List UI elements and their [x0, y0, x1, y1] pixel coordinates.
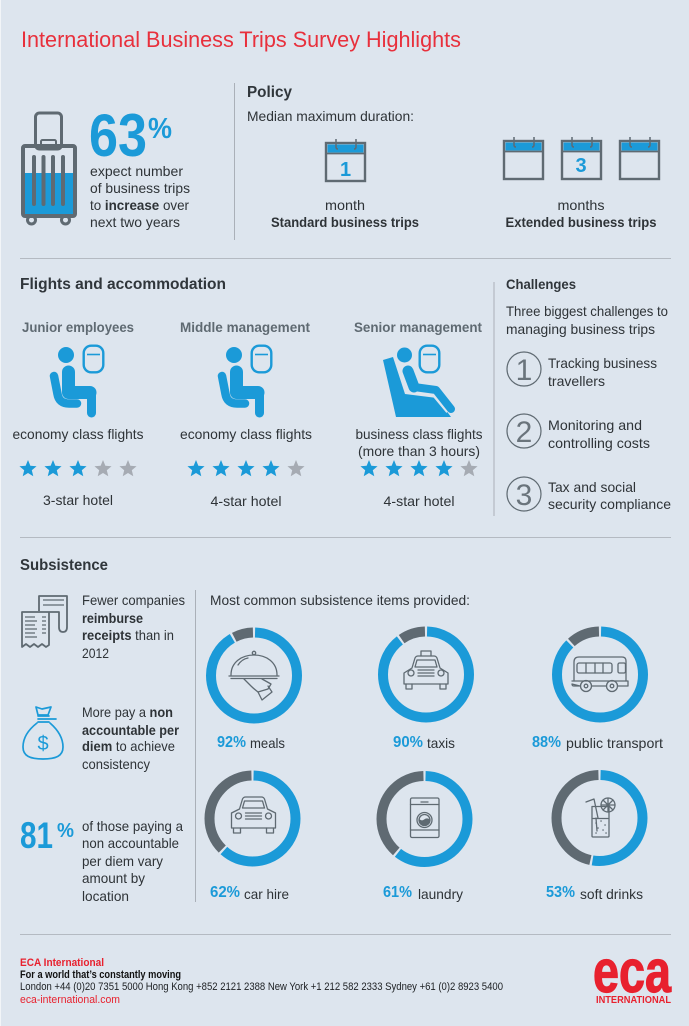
icon: money bag: [23, 707, 63, 759]
footer contact text: London +44 (0)20 7351 5000 Hong Kong +852 2121 2388 New York +1 212 582 2333 Sydney +61 (0)2 8923 5400: [20, 981, 503, 993]
text: per diem: accountable per: [82, 722, 179, 738]
column: junior employees: economy class flights: [12, 426, 144, 442]
donut: meals 92%: meals: [250, 735, 285, 751]
icon: calendars 3 months: 3: [575, 155, 587, 177]
text: vary amount by location: per diem vary: [82, 853, 163, 869]
icon: calendars 3 months: [504, 137, 659, 179]
heading: policy: Policy: [247, 84, 292, 101]
label: standard business trips: [271, 197, 419, 230]
column: senior management: Senior management: [354, 319, 482, 335]
donut: soft drinks 53%: 53%: [546, 884, 575, 901]
challenge 3: security compliance: [548, 496, 671, 512]
challenge 1: travellers: [548, 373, 605, 389]
footer contact text: [20, 957, 503, 1006]
icon: money bag: $: [37, 733, 49, 755]
text: vary amount by location: non accountable: [82, 835, 179, 851]
challenge 1: 1: [516, 354, 532, 387]
donut: public transport 88%: 88%: [532, 734, 561, 751]
donut: public transport 88%: public transport: [566, 735, 663, 751]
donut: car hire 62%: car hire: [244, 886, 289, 902]
challenge 2: 2: [516, 416, 532, 449]
donut: laundry 61%: 61%: [383, 884, 412, 901]
text: reimburse receipts: reimburse: [82, 610, 143, 626]
donut: taxis 90%: 90%: [393, 734, 423, 751]
panel: challenges: Three biggest challenges to: [506, 303, 668, 319]
donut: laundry 61%: [382, 776, 468, 902]
icon: economy seat: [54, 346, 103, 413]
panel: challenges: [506, 276, 671, 512]
stat: 63% expect more trips: of business trips: [90, 180, 190, 196]
donut: meals 92%: [211, 632, 297, 751]
text: vary amount by location: location: [82, 888, 129, 904]
footer contact text: For a world that’s constantly moving: [20, 969, 181, 981]
subsistence chart heading: Most common subsistence items provided:: [210, 592, 470, 608]
icon: suitcase: [23, 113, 75, 224]
challenge 2: controlling costs: [548, 435, 650, 451]
icon: economy seat: [222, 346, 271, 413]
stat: 63% expect more trips: 63: [89, 102, 147, 169]
text: reimburse receipts: receipts than in: [82, 627, 174, 643]
challenge 2: [507, 414, 650, 451]
column: senior management: 4-star hotel: [384, 493, 454, 509]
challenge 2: Monitoring and: [548, 417, 642, 433]
stat: 63% expect more trips: %: [148, 113, 172, 145]
donut: soft drinks 53%: soft drinks: [580, 886, 643, 902]
label: extended business trips: Extended business trips: [506, 214, 657, 230]
icon: soft drink: [586, 798, 615, 837]
text: vary amount by location: of those paying a: [82, 818, 183, 834]
column: middle management: Middle management: [180, 319, 310, 335]
challenge 3: [507, 477, 671, 512]
stat: 81%: 81: [20, 815, 53, 856]
challenge 1: [507, 352, 657, 389]
label: extended business trips: [506, 197, 657, 230]
star rating 3 of 5: [19, 460, 137, 476]
donut: car hire 62%: 62%: [210, 884, 240, 901]
text: per diem: More pay a non: [82, 704, 173, 720]
text: per diem: diem to achieve: [82, 738, 175, 754]
stat: 63% expect more trips: [89, 102, 190, 230]
heading: subsistence: Subsistence: [20, 557, 108, 574]
donut: car hire 62%: [210, 776, 296, 902]
donut: taxis 90%: taxis: [427, 735, 455, 751]
stat: 81%: %: [57, 820, 74, 842]
icon: calendar 1 month: [326, 139, 365, 181]
column: senior management: business class flights: [356, 426, 482, 442]
text: per diem: [82, 704, 179, 772]
footer contact text: ECA International: [20, 957, 104, 969]
label: standard business trips: Standard business trips: [271, 214, 419, 230]
icon: bus: [572, 657, 628, 692]
heading: flights and accommodation: Flights and accommodation: [20, 276, 226, 293]
icon: calendar 1 month: 1: [340, 159, 351, 181]
text: per diem: consistency: [82, 756, 150, 772]
text: vary amount by location: amount by: [82, 870, 145, 886]
column: middle management: 4-star hotel: [210, 493, 282, 509]
text: vary amount by location: [82, 818, 183, 904]
column: junior employees: 3-star hotel: [43, 492, 113, 508]
footer contact text: eca-international.com: [20, 994, 120, 1006]
icon: business seat: [383, 346, 451, 417]
icon: washing machine: [410, 798, 439, 838]
donut: taxis 90%: [383, 632, 469, 751]
donut: soft drinks 53%: [546, 775, 643, 902]
column: senior management: [354, 319, 482, 509]
donut: meals 92%: 92%: [217, 734, 246, 751]
text: reimburse receipts: [82, 592, 185, 661]
text: reimburse receipts: 2012: [82, 645, 109, 661]
stat: 63% expect more trips: to increase over: [90, 197, 189, 213]
policy intro text: Median maximum duration:: [247, 108, 414, 124]
icon: receipts: [22, 596, 67, 647]
star rating 4 of 5: [187, 460, 305, 476]
icon: cloche: [229, 651, 279, 700]
icon: taxi: [404, 651, 448, 689]
title: International Business Trips Survey Highlights: [21, 27, 461, 52]
icon: car: [232, 797, 276, 833]
label: extended business trips: months: [558, 197, 604, 213]
text: reimburse receipts: Fewer companies: [82, 592, 185, 608]
column: junior employees: [12, 319, 144, 508]
challenge 1: Tracking business: [548, 355, 657, 371]
stat: 63% expect more trips: expect number: [90, 163, 183, 179]
label: standard business trips: month: [325, 197, 365, 213]
challenge 3: 3: [516, 479, 532, 512]
challenge 3: Tax and social: [548, 479, 636, 495]
donut: public transport 88%: [532, 632, 663, 751]
column: junior employees: Junior employees: [22, 319, 134, 335]
panel: challenges: managing business trips: [506, 321, 655, 337]
panel: challenges: Challenges: [506, 276, 576, 292]
column: senior management: (more than 3 hours): [358, 443, 480, 459]
logo: ECA International: INTERNATIONAL: [596, 995, 671, 1006]
column: middle management: economy class flights: [180, 426, 312, 442]
donut: laundry 61%: laundry: [418, 886, 463, 902]
column: middle management: [180, 319, 312, 509]
star rating 4 of 5: [360, 460, 478, 476]
stat: 63% expect more trips: next two years: [90, 214, 180, 230]
